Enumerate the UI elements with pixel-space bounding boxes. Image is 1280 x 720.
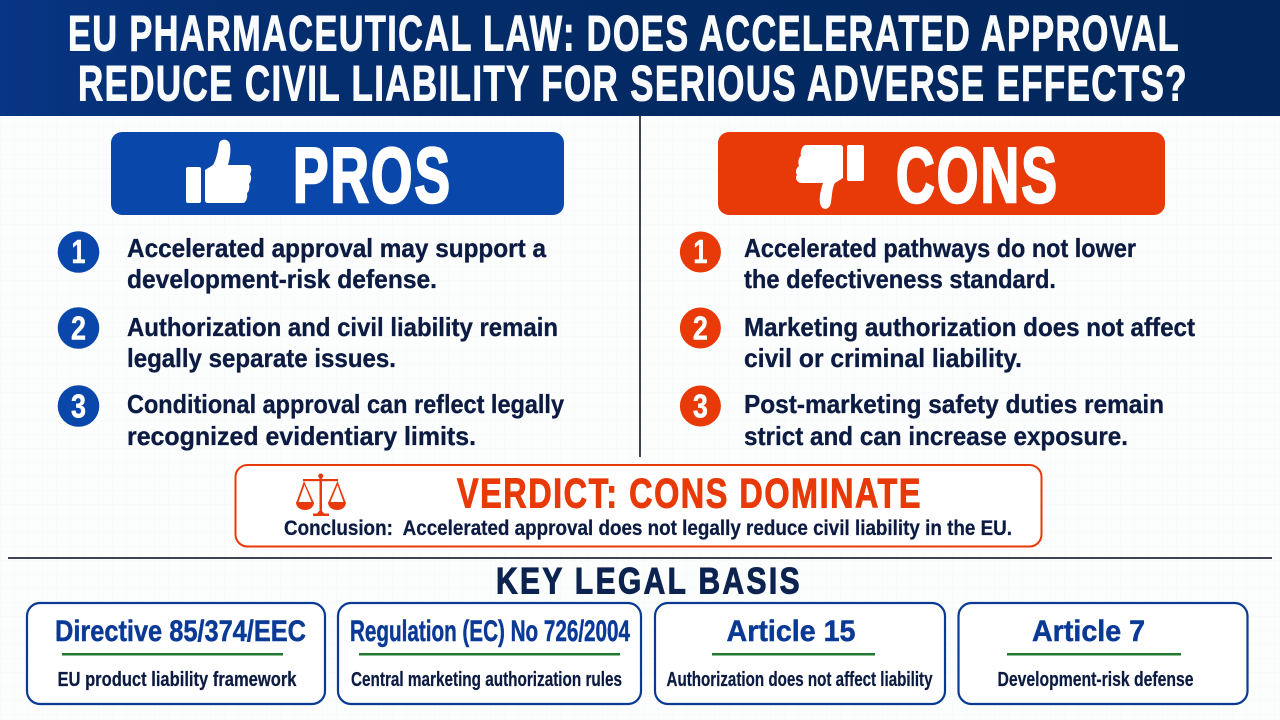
card: Article 15: Authorization does not affect liability <box>666 669 933 691</box>
pro item 2: legally separate issues. <box>127 343 396 373</box>
key legal basis heading: KEY LEGAL BASIS <box>496 560 802 602</box>
section divider <box>8 557 1272 559</box>
pro item 1 <box>58 231 546 294</box>
pro item 3: Conditional approval can reflect legally <box>127 389 564 419</box>
cons heading banner <box>718 131 1165 219</box>
card: Article 7: Article 7 <box>1032 615 1145 648</box>
panel: cons <box>680 131 1195 451</box>
card: Article 15 <box>655 603 945 704</box>
con item 3: 3 <box>693 388 708 424</box>
panel: pros <box>58 131 564 451</box>
pro item 3 <box>58 385 564 451</box>
card: Article 7 <box>958 603 1248 704</box>
con item 1 <box>680 232 1136 294</box>
con item 3 <box>680 386 1164 451</box>
pros heading banner <box>111 131 564 219</box>
pro item 3: 3 <box>71 388 86 424</box>
con item 3: Post-marketing safety duties remain <box>744 389 1164 419</box>
pros label: PROS <box>293 131 452 219</box>
pro item 2 <box>58 307 558 373</box>
center divider <box>639 116 641 457</box>
card: Article 15: Article 15 <box>726 615 856 648</box>
con item 2: 2 <box>693 310 708 346</box>
icon: thumbs down <box>796 145 864 209</box>
pro item 3: recognized evidentiary limits. <box>127 421 476 451</box>
pro item 1: 1 <box>72 233 86 270</box>
con item 1: the defectiveness standard. <box>744 264 1056 294</box>
icon: thumbs up <box>186 140 251 203</box>
cons label: CONS <box>896 131 1059 219</box>
pro item 2: Authorization and civil liability remain <box>127 312 558 342</box>
card: Regulation (EC) No 726/2004: Regulation (EC) No 726/2004 <box>350 615 630 648</box>
verdict heading: VERDICT: CONS DOMINATE <box>457 470 922 516</box>
card: Directive 85/374/EEC: EU product liability framework <box>58 669 297 691</box>
card: Regulation (EC) No 726/2004 <box>338 603 641 704</box>
title banner <box>0 0 1280 116</box>
con item 2: civil or criminal liability. <box>744 343 1022 373</box>
card: Article 7: Development-risk defense <box>998 669 1194 691</box>
card: Directive 85/374/EEC <box>27 603 325 704</box>
con item 1: 1 <box>693 233 707 270</box>
icon: scales of justice <box>296 474 346 516</box>
verdict box <box>236 465 1042 546</box>
pro item 1: development-risk defense. <box>127 264 437 294</box>
con item 2: Marketing authorization does not affect <box>744 312 1195 342</box>
panel: key legal basis cards <box>27 603 1248 704</box>
con item 3: strict and can increase exposure. <box>744 421 1128 451</box>
card: Directive 85/374/EEC: Directive 85/374/EEC <box>55 615 306 648</box>
con item 1: Accelerated pathways do not lower <box>744 233 1136 263</box>
conclusion text: Conclusion: Accelerated approval does not legally reduce civil liability in the EU. <box>284 517 1012 540</box>
con item 2 <box>680 308 1195 373</box>
pro item 2: 2 <box>71 310 86 346</box>
pro item 1: Accelerated approval may support a <box>127 233 546 263</box>
card: Regulation (EC) No 726/2004: Central marketing authorization rules <box>351 669 622 691</box>
